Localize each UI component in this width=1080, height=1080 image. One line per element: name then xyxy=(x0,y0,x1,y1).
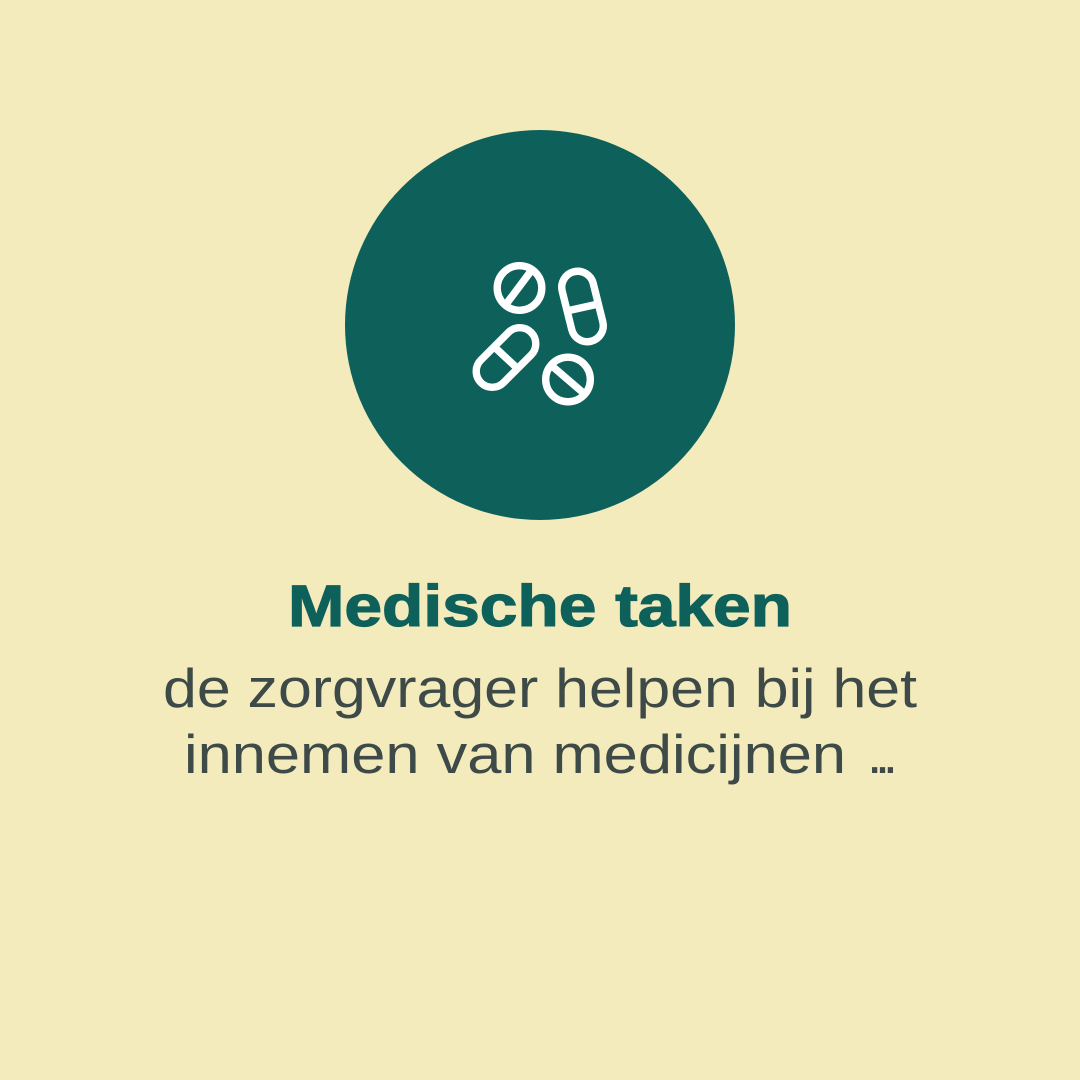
body line 1: de zorgvrager helpen bij het xyxy=(163,657,917,719)
heading: Medische taken xyxy=(288,574,792,639)
icon: round tablet bottom right xyxy=(546,357,590,402)
body line 2: innemen van medicijnen xyxy=(184,723,846,785)
icon: capsule right xyxy=(558,268,607,345)
icon: pills xyxy=(470,266,607,402)
body text xyxy=(163,657,917,785)
icon: capsule left xyxy=(470,321,542,394)
teal circle badge xyxy=(345,130,735,520)
ellipsis: ... xyxy=(867,723,898,785)
icon: round tablet top left xyxy=(497,266,542,310)
